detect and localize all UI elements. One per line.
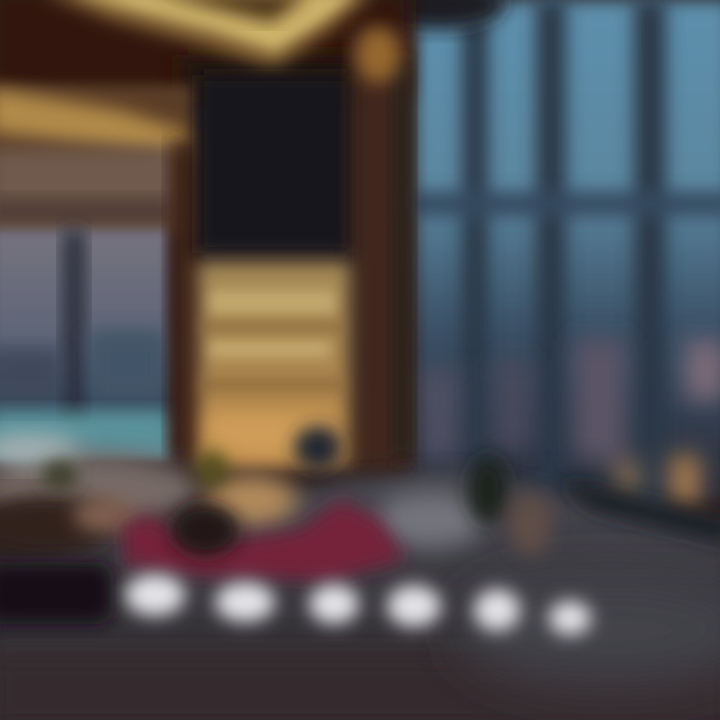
- lower window glow: [420, 340, 720, 505]
- panel: lounge seating left: [0, 434, 200, 624]
- panel: dark navy wall panel: [198, 75, 353, 253]
- panel: left wall and cove light: [0, 85, 195, 235]
- panel: left windows: [0, 140, 200, 460]
- dark corner top: [375, 0, 505, 29]
- icon: plants: [42, 426, 552, 555]
- panel: ceiling: [0, 0, 410, 95]
- panel: golden lit wall: [198, 262, 350, 467]
- panel: red carpet: [122, 500, 405, 580]
- icon: row of white lights: [125, 574, 591, 635]
- window pillars: [405, 0, 720, 520]
- dark right edge floor shadow: [560, 480, 720, 545]
- panel: floor: [0, 470, 720, 720]
- ceiling gold light band: [40, 0, 375, 68]
- panel: right window wall: [375, 0, 720, 520]
- panel: wooden column: [352, 27, 412, 470]
